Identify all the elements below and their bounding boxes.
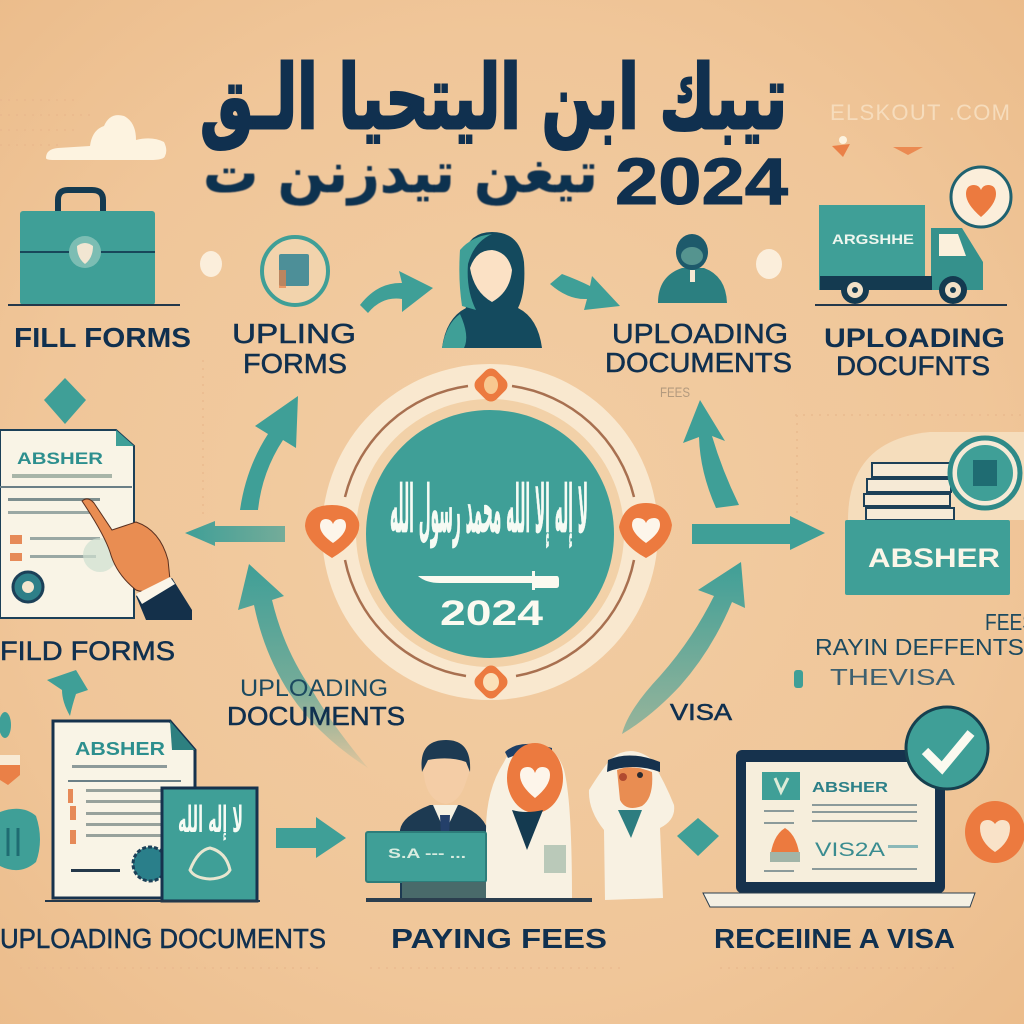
label: fees paying (right): [794, 609, 1024, 690]
central badge: [305, 364, 672, 702]
label: receive a visa: RECEIINE A VISA: [714, 923, 955, 954]
icon: laptop with visa screen: VIS2A: [815, 840, 885, 861]
icon: briefcase: [8, 190, 180, 306]
label: uploading documents (upper right center): FEES: [660, 384, 690, 400]
label: uploading documents (upper right center): DOCUMENTS: [605, 347, 792, 378]
label: fill forms: FILL FORMS: [14, 322, 191, 353]
right heart badge: [619, 503, 672, 558]
icon: diamond upper left: [44, 378, 86, 424]
icon: fees terminal: S.A --- ...: [388, 845, 466, 861]
icon: fees terminal: [366, 832, 592, 902]
label: visa: VISA: [670, 699, 733, 725]
icon: cloud: [46, 115, 166, 160]
center year: 2024: [440, 594, 544, 633]
label: uploading docufnts (top right): [824, 323, 1005, 381]
icon: absher form with hand: ABSHER: [17, 449, 103, 468]
icon: person in white robe with orange badge: [486, 743, 572, 900]
icon: orange heart badge: [965, 801, 1024, 863]
label: uploading forms (upper left): FORMS: [243, 348, 347, 379]
label: fees paying (right): THEVISA: [830, 664, 956, 690]
arrow: middle right: [692, 516, 825, 550]
left heart badge: [305, 505, 359, 558]
title: arabic second line: تيغن تيدزنن ت: [203, 141, 598, 206]
label: uploading documents (upper right center): [605, 318, 792, 400]
label: paying fees: PAYING FEES: [391, 923, 607, 954]
icon: delivery truck: [815, 167, 1011, 306]
icon: absher document and passport: [45, 721, 260, 902]
label: uploading documents (center left): DOCUMENTS: [227, 701, 405, 731]
icon: woman in hijab: [442, 232, 542, 348]
watermark: ELSKOUT .COM: [830, 100, 1010, 125]
arrow: from woman: [550, 274, 620, 310]
label: uploading documents (upper right center): UPLOADING: [612, 318, 788, 349]
icon: circle form: [262, 237, 328, 305]
arrow: curved up left: [240, 396, 298, 510]
label: fild forms: FILD FORMS: [0, 636, 175, 666]
icon: left edge fragments: [0, 712, 40, 870]
arrow: small down-left pointer: [47, 670, 88, 716]
icon: absher card stack: ABSHER: [868, 543, 1000, 573]
label: fees paying (right): RAYIN DEFFENTS: [815, 634, 1024, 660]
decorative blob left: [200, 251, 222, 277]
arrow: diamond to visa: [677, 818, 719, 856]
flag circle: [366, 410, 614, 658]
label: uploading documents (bottom left): UPLOADING DOCUMENTS: [0, 923, 326, 954]
icon: man in ghutra: [589, 751, 674, 900]
label: uploading forms (upper left): UPLING: [232, 318, 356, 349]
arrow: curved up right: [683, 400, 739, 508]
decorative blob right: [756, 249, 782, 279]
label: uploading docufnts (top right): UPLOADING: [824, 323, 1005, 353]
icon: absher document and passport: لا إله الله: [178, 800, 243, 841]
arrow: middle left: [185, 521, 285, 546]
icon: absher card stack: [845, 432, 1024, 595]
small orange marks: [832, 136, 923, 157]
sword: [418, 571, 559, 590]
label: uploading docufnts (top right): DOCUFNTS: [836, 351, 990, 381]
icon: absher document and passport: ABSHER: [75, 739, 165, 759]
bottom orange node: [471, 662, 511, 702]
icon: delivery truck: ARGSHHE: [832, 231, 914, 247]
title: year 2024: 2024: [615, 144, 788, 218]
arrow: to woman: [360, 271, 433, 313]
arrow: lower right curve: [622, 562, 745, 734]
icon: laptop with visa screen: ABSHER: [812, 779, 888, 796]
icon: person in suit: [400, 740, 489, 900]
arrow: to fees: [276, 817, 346, 858]
label: uploading documents (center left): [227, 675, 405, 731]
arrow: lower left curve: [238, 564, 368, 768]
top orange node: [471, 365, 511, 405]
label: uploading documents (center left): UPLOADING: [240, 675, 388, 702]
icon: absher form with hand: [0, 430, 192, 620]
label: uploading forms (upper left): [232, 318, 356, 379]
icon: person bust: [658, 234, 727, 303]
icon: laptop with visa screen: [703, 707, 988, 907]
